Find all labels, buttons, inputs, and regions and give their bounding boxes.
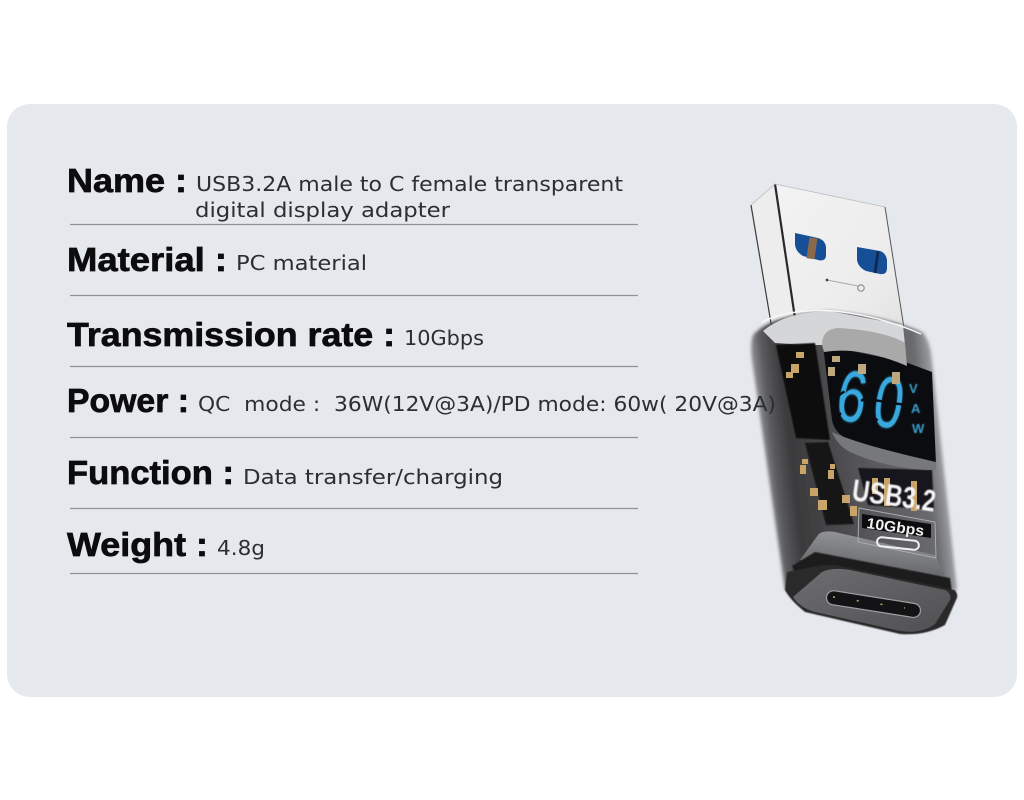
10Gbps badge: 10Gbps xyxy=(865,515,925,540)
USB-A metal plug xyxy=(751,184,905,350)
spec row: power: Power : xyxy=(67,382,189,419)
USB-C end cap xyxy=(785,565,957,634)
spec row: transmission rate: Transmission rate : xyxy=(67,316,395,353)
dark circuit board blocks xyxy=(776,343,830,440)
LED display window xyxy=(822,328,936,470)
spec row: function: Data transfer/charging xyxy=(243,465,503,489)
panel: specification card xyxy=(7,104,1017,697)
transparent housing xyxy=(751,310,957,592)
spec row: name: Name : xyxy=(67,162,187,199)
spec row: material xyxy=(67,241,638,296)
spec row: weight xyxy=(67,526,638,574)
spec row: material: PC material xyxy=(236,251,367,275)
spec row: weight: 4.8g xyxy=(217,536,265,560)
spec row: transmission rate xyxy=(67,316,638,366)
LED digits: 60 xyxy=(831,356,910,445)
LED unit labels: W xyxy=(912,421,925,436)
spec row: name: USB3.2A male to C female transparent xyxy=(196,172,623,196)
product image: USB adapter xyxy=(751,184,957,634)
LED unit labels xyxy=(909,381,925,436)
spec row: power xyxy=(67,382,776,438)
spec row: name xyxy=(67,162,638,224)
USB3.2 print: USB3.2 xyxy=(850,472,938,519)
spec row: name: digital display adapter xyxy=(195,198,451,222)
spec row: transmission rate: 10Gbps xyxy=(404,326,484,350)
spec row: weight: Weight : xyxy=(67,526,208,563)
spec row: material: Material : xyxy=(67,241,227,278)
spec row: function xyxy=(67,454,638,508)
lower translucent block xyxy=(800,531,945,575)
LED unit labels: A xyxy=(911,401,921,416)
PCB gold contacts xyxy=(786,352,917,516)
spec row: power: QC mode : 36W(12V@3A)/PD mode: 60w( 20V@3A) xyxy=(198,392,776,416)
10Gbps badge xyxy=(858,508,936,558)
LED unit labels: V xyxy=(909,381,918,396)
spec row: function: Function : xyxy=(67,454,234,491)
